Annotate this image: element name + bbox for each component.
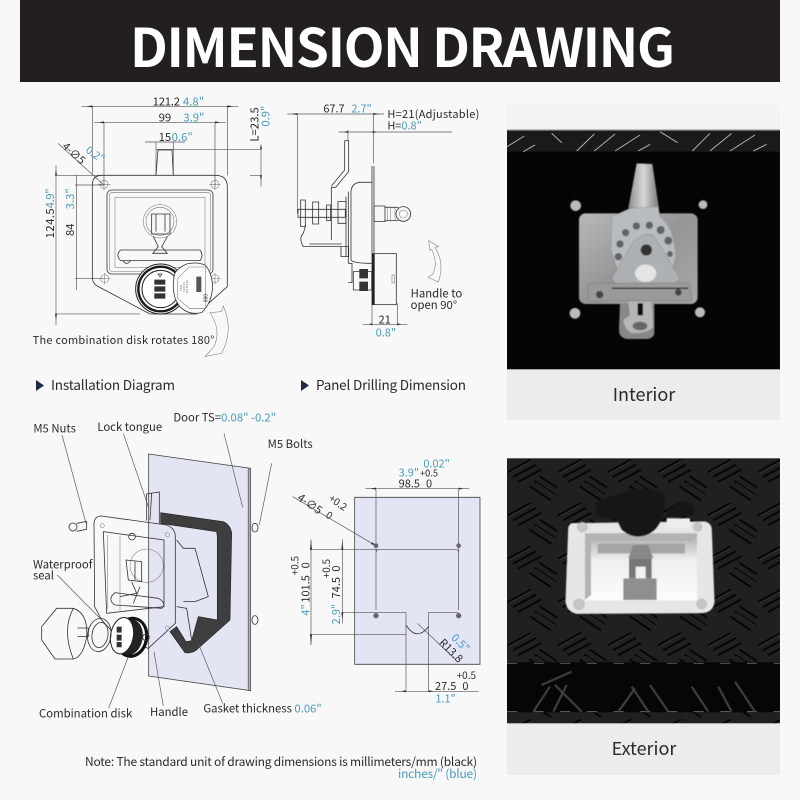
heading: panel drilling dimension: Panel Drilling Dimension bbox=[316, 374, 466, 394]
gasket bbox=[161, 513, 232, 653]
rotation arrow: handle bbox=[428, 241, 441, 282]
leader lines bbox=[57, 433, 272, 708]
drilling labels bbox=[286, 456, 476, 706]
installation labels bbox=[33, 410, 322, 721]
dimension labels: front view: 4-∅5 bbox=[59, 139, 89, 168]
photo card: exterior bbox=[507, 458, 780, 775]
dimension lines: front view bbox=[55, 105, 262, 325]
dimension labels: front view: 15 bbox=[159, 129, 171, 145]
rotation arrow: combination disk bbox=[205, 306, 228, 357]
drilling labels: 4-∅5 bbox=[294, 489, 326, 518]
dimension labels: side view: 2.7" bbox=[351, 100, 372, 116]
combination disk bbox=[136, 264, 186, 314]
drilling labels: 0.02" bbox=[423, 456, 450, 472]
M5 nut bbox=[69, 521, 87, 531]
dimension labels: front view: 0.6" bbox=[172, 129, 193, 145]
lock tongue bbox=[147, 492, 159, 523]
title banner bbox=[20, 0, 780, 83]
dimension labels: front view: 4.9" bbox=[42, 188, 58, 208]
dimension labels: side view: 21 bbox=[379, 311, 391, 327]
photo card: interior bbox=[507, 105, 780, 420]
mounting holes bbox=[373, 543, 461, 618]
drilling labels: +0.5 bbox=[420, 465, 438, 479]
technical drawing: front view bbox=[33, 93, 273, 357]
dimension labels: side view bbox=[323, 100, 479, 341]
door edge bbox=[246, 468, 251, 690]
dimension labels: front view: 84 bbox=[62, 223, 78, 236]
drilling labels: +0.5 bbox=[318, 559, 333, 578]
latch rear bracket bbox=[177, 540, 208, 640]
dimension labels: side view: H=21(Adjustable) bbox=[387, 106, 479, 122]
dimension labels: front view: 4.8" bbox=[183, 93, 204, 109]
drilling labels: 0.5" bbox=[448, 630, 474, 656]
drilling labels: 2.9" bbox=[328, 604, 344, 624]
dimension labels: front view: 3.9" bbox=[183, 109, 204, 125]
dimension labels: side view: H=0.8" bbox=[387, 117, 422, 133]
dimension labels: front view: 99 bbox=[159, 109, 171, 125]
dimension labels: front view: 3.3" bbox=[62, 188, 78, 209]
drilling labels: +0.5 bbox=[286, 556, 301, 575]
door panel bbox=[149, 454, 251, 691]
drilling labels: 0 bbox=[297, 562, 313, 568]
cover part bbox=[42, 608, 88, 659]
latch side profile bbox=[298, 141, 411, 305]
installation labels: M5 Nuts bbox=[33, 420, 76, 436]
label: handle to open: open 90° bbox=[411, 297, 457, 313]
drilling labels: R13.8 bbox=[435, 635, 467, 666]
drilling labels: 101.5 bbox=[297, 575, 313, 603]
installation labels: Handle bbox=[150, 704, 188, 720]
drilling labels: 4" bbox=[297, 604, 313, 616]
dimension labels: front view: L=23.5 bbox=[247, 107, 263, 142]
waterproof seal ring bbox=[85, 617, 113, 653]
dimension labels: front view: 121.2 bbox=[153, 93, 180, 109]
note: disk rotation: The combination disk rotates 180° bbox=[33, 332, 214, 348]
drilling labels: 0 bbox=[426, 475, 432, 491]
dimension labels: side view: 0.8" bbox=[376, 325, 396, 341]
dimension labels: front view: 0.2" bbox=[83, 143, 108, 166]
drilling labels: 1.1" bbox=[435, 690, 456, 706]
installation labels: Combination disk bbox=[39, 705, 133, 721]
drilling labels: +0.2 bbox=[326, 490, 351, 514]
heading: installation diagram: Installation Diagram bbox=[51, 374, 175, 394]
drilling labels: 98.5 bbox=[399, 475, 420, 491]
note: units: Note: The standard unit of drawing dimensions is millimeters/mm (black) bbox=[85, 753, 477, 770]
exploded installation diagram bbox=[33, 410, 322, 721]
note: units bbox=[85, 753, 477, 782]
drilling labels: 0 bbox=[462, 678, 468, 694]
installation labels: seal bbox=[33, 568, 54, 584]
installation labels: Door TS=0.08" -0.2" bbox=[173, 410, 276, 426]
installation labels: Waterproof bbox=[33, 556, 94, 572]
installation labels: M5 Bolts bbox=[268, 436, 313, 452]
drilling dimension lines bbox=[293, 488, 479, 692]
caption: exterior: Exterior bbox=[612, 735, 677, 761]
drilling labels: 27.5 bbox=[435, 678, 456, 694]
drilling labels: 3.9" bbox=[399, 464, 419, 480]
photo: interior latch bbox=[507, 130, 780, 369]
label: handle to open: Handle to bbox=[411, 285, 462, 301]
installation labels: Gasket thickness 0.06" bbox=[203, 701, 322, 717]
drilled panel with cut-out bbox=[355, 497, 480, 664]
title banner: DIMENSION DRAWING bbox=[130, 7, 675, 83]
drilling labels: 0 bbox=[328, 566, 344, 572]
dimension labels: front view bbox=[42, 93, 273, 238]
combination disk cover bbox=[173, 263, 213, 313]
dimension labels: front view: 124.5 bbox=[42, 208, 58, 238]
note: units: inches/" (blue) bbox=[398, 765, 477, 782]
technical drawing: side view bbox=[287, 100, 479, 341]
photo: exterior latch bbox=[507, 458, 780, 723]
caption: interior: Interior bbox=[613, 381, 676, 407]
M5 bolts bbox=[252, 523, 258, 624]
latch plate outline bbox=[92, 150, 227, 314]
dimension lines: side view bbox=[287, 113, 452, 325]
drilling labels: 74.5 bbox=[328, 577, 344, 598]
combination disk parts bbox=[108, 614, 152, 661]
drilling labels: 0 bbox=[323, 507, 337, 523]
dimension labels: front view: 0.9" bbox=[257, 106, 273, 127]
dimension labels: side view: 67.7 bbox=[323, 100, 345, 116]
installation labels: Lock tongue bbox=[97, 419, 162, 435]
combination disk cover: 080 bbox=[201, 294, 208, 303]
drilling labels: +0.5 bbox=[457, 667, 476, 682]
panel drilling diagram bbox=[286, 456, 480, 706]
latch flange bbox=[94, 516, 175, 648]
